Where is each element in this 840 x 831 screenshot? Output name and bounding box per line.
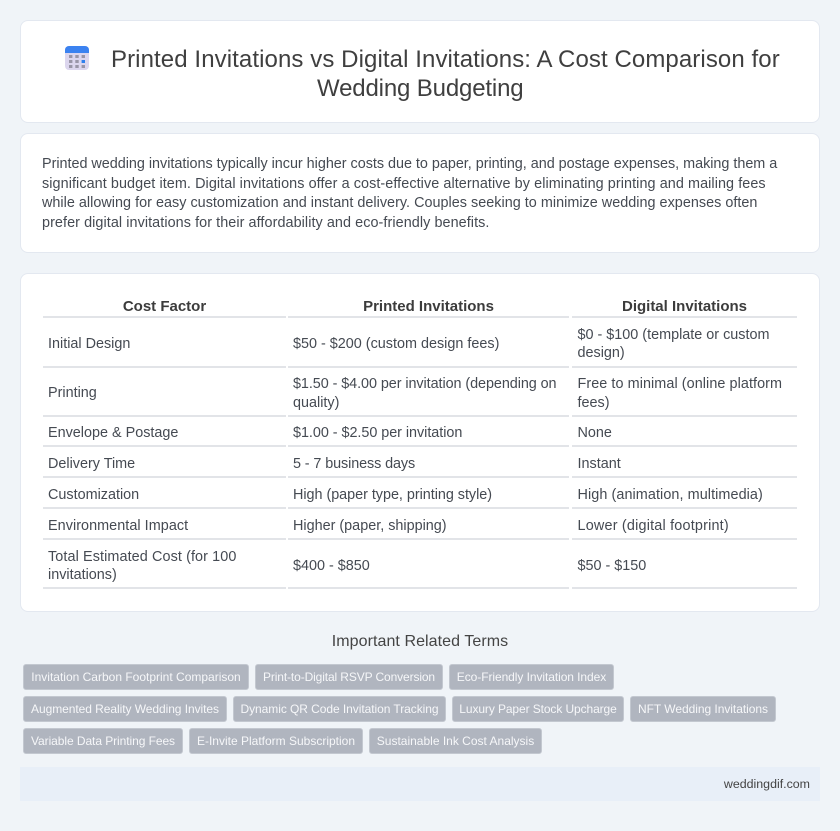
row: envelope and postage: Envelope & Postage xyxy=(48,425,178,441)
panel: header xyxy=(20,20,820,123)
row: printing xyxy=(48,376,782,410)
tag xyxy=(369,728,542,754)
tag: Invitation Carbon Footprint Comparison xyxy=(31,670,241,684)
tag xyxy=(23,728,183,754)
text block: description: while allowing for easy customization and instant delivery. Couples seeking to minimize wedding expenses often xyxy=(42,195,757,211)
row: customization: High (animation, multimedia) xyxy=(578,487,763,503)
footer xyxy=(20,767,820,801)
title xyxy=(111,46,780,102)
tag xyxy=(255,664,443,690)
row: initial design: $0 - $100 (template or custom xyxy=(578,327,769,343)
tag xyxy=(23,696,227,722)
row: initial design: design) xyxy=(578,345,625,361)
row: printing: $1.50 - $4.00 per invitation (depending on xyxy=(293,376,556,392)
row: environmental impact: Higher (paper, shipping) xyxy=(293,518,447,534)
row: customization xyxy=(48,487,763,503)
tag: NFT Wedding Invitations xyxy=(638,702,768,716)
icon: calendar xyxy=(65,46,89,70)
text block: description xyxy=(42,156,778,230)
row: printing: quality) xyxy=(293,394,339,410)
row: total estimated cost: $50 - $150 xyxy=(578,558,646,574)
tag: E-Invite Platform Subscription xyxy=(197,734,355,748)
text block: description: Printed wedding invitations typically incur higher costs due to paper, printing, and postage expenses, making them a xyxy=(42,156,777,172)
footer text: weddingdif.com xyxy=(724,777,810,791)
tag: Print-to-Digital RSVP Conversion xyxy=(263,670,435,684)
row: printing: Printing xyxy=(48,385,97,401)
text block: description: prefer digital invitations for their affordability and eco-friendly benefits. xyxy=(42,214,489,230)
tag xyxy=(233,696,446,722)
row: initial design xyxy=(48,327,769,361)
tag xyxy=(630,696,776,722)
tag: Dynamic QR Code Invitation Tracking xyxy=(240,702,438,716)
panel: cost comparison table xyxy=(20,273,820,612)
row: delivery time: 5 - 7 business days xyxy=(293,456,415,472)
tag: Sustainable Ink Cost Analysis xyxy=(377,734,534,748)
tag: Variable Data Printing Fees xyxy=(31,734,175,748)
panel: description xyxy=(20,133,820,253)
row: total estimated cost xyxy=(48,549,646,583)
row: environmental impact: Lower (digital footprint) xyxy=(578,518,729,534)
title: Wedding Budgeting xyxy=(317,75,524,102)
tag: Augmented Reality Wedding Invites xyxy=(31,702,219,716)
tag xyxy=(189,728,363,754)
text block: description: significant budget item. Digital invitations offer a cost-effective alternative by eliminating printing and mailing fees xyxy=(42,176,766,192)
row: initial design: $50 - $200 (custom design fees) xyxy=(293,336,499,352)
tag xyxy=(449,664,614,690)
row: customization: High (paper type, printing style) xyxy=(293,487,492,503)
row: total estimated cost: invitations) xyxy=(48,567,117,583)
row: delivery time: Instant xyxy=(578,456,621,472)
table header: Printed Invitations xyxy=(363,298,494,315)
tag xyxy=(452,696,624,722)
row: delivery time xyxy=(48,456,621,472)
tag list xyxy=(23,664,776,754)
row: total estimated cost: $400 - $850 xyxy=(293,558,370,574)
tag: Luxury Paper Stock Upcharge xyxy=(459,702,617,716)
row: delivery time: Delivery Time xyxy=(48,456,135,472)
row: initial design: Initial Design xyxy=(48,336,130,352)
heading: important related terms: Important Related Terms xyxy=(332,633,508,650)
table header: Cost Factor xyxy=(123,298,206,315)
row: environmental impact: Environmental Impact xyxy=(48,518,188,534)
table xyxy=(43,298,797,589)
table header xyxy=(123,298,747,315)
row: printing: fees) xyxy=(578,394,610,410)
table header: Digital Invitations xyxy=(622,298,747,315)
row: environmental impact xyxy=(48,518,729,534)
row: customization: Customization xyxy=(48,487,139,503)
tag xyxy=(23,664,249,690)
row: envelope and postage: None xyxy=(578,425,612,441)
row: total estimated cost: Total Estimated Cost (for 100 xyxy=(48,549,236,565)
row: envelope and postage xyxy=(48,425,612,441)
tag: Eco-Friendly Invitation Index xyxy=(457,670,606,684)
title: Printed Invitations vs Digital Invitations: A Cost Comparison for xyxy=(111,46,780,73)
row: envelope and postage: $1.00 - $2.50 per invitation xyxy=(293,425,462,441)
row: printing: Free to minimal (online platform xyxy=(578,376,782,392)
